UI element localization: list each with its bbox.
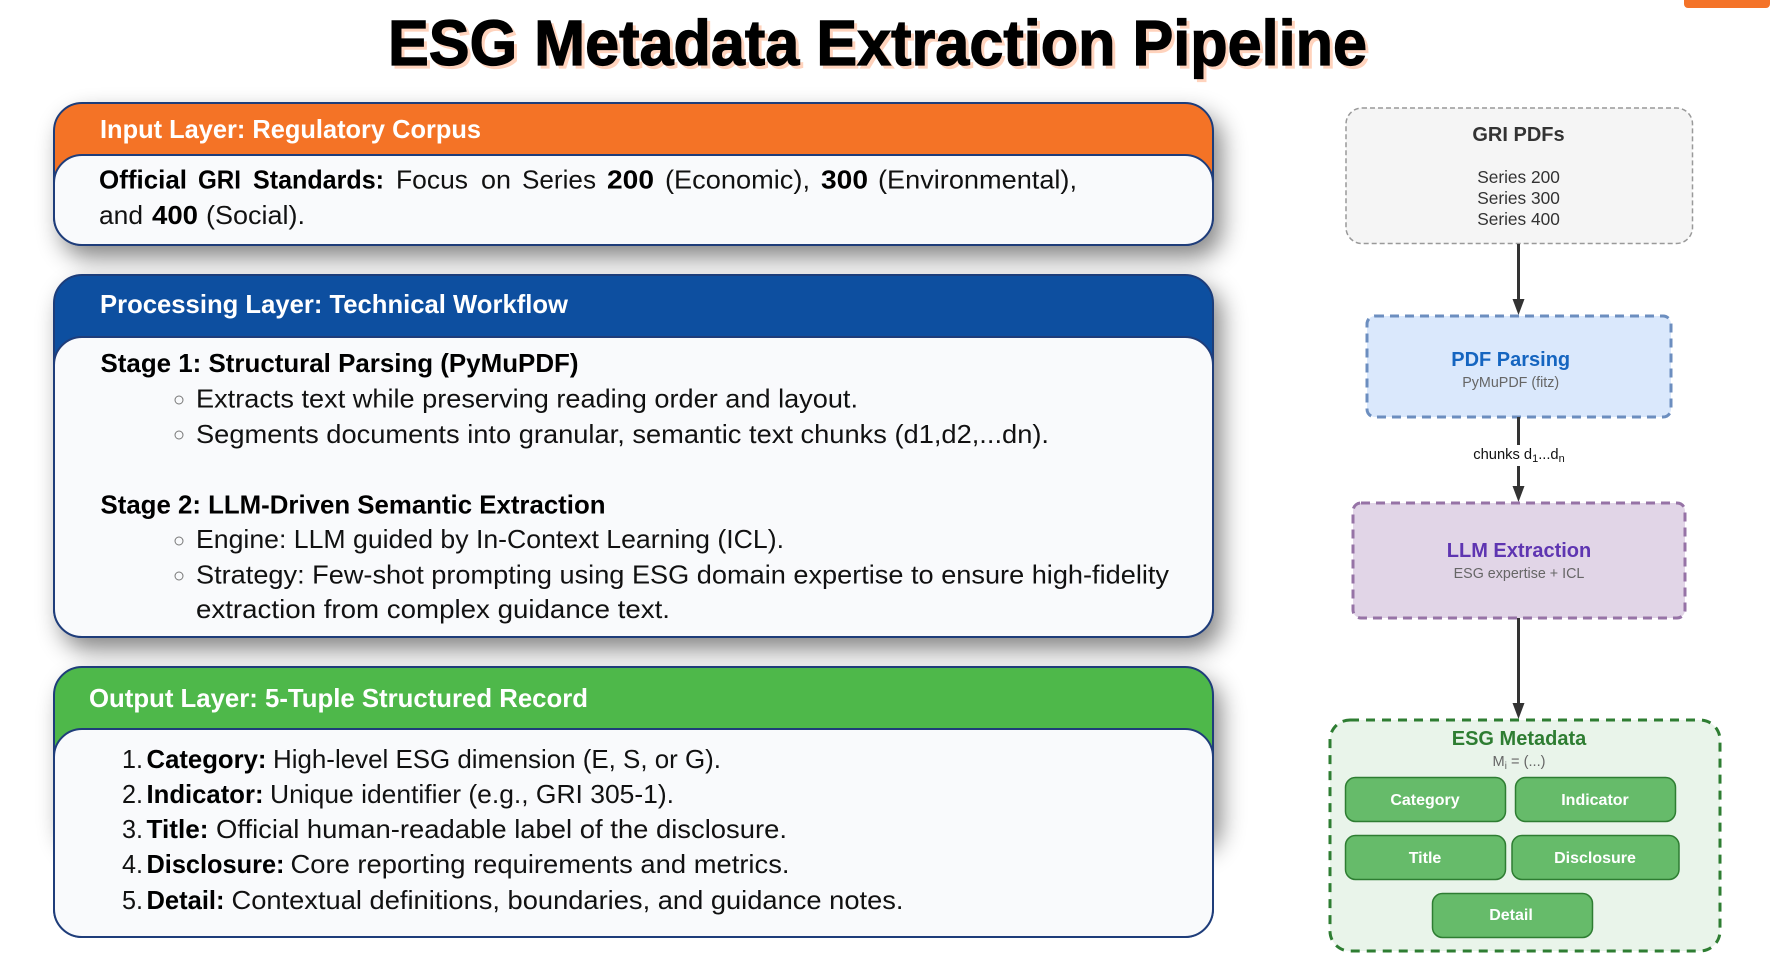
output layer shadow: [54, 667, 1213, 842]
item 2: 2.: [122, 779, 143, 809]
node: GRI PDFs: GRI PDFs: [1472, 124, 1565, 146]
node: LLM Extraction: LLM Extraction: [1447, 540, 1591, 562]
arrow label: chunks: ...d: [1538, 447, 1559, 463]
input layer body: (Social).: [206, 200, 305, 230]
item 5: Contextual definitions, boundaries, and guidance notes.: [232, 885, 904, 915]
node: PDF Parsing: PyMuPDF (fitz): [1462, 375, 1559, 391]
stage 2: Strategy: Few-shot prompting using ESG domain expertise to ensure high-fidelity: [196, 560, 1169, 590]
node: ESG Metadata: i: [1505, 760, 1507, 772]
stage 1: [100, 348, 1049, 449]
node: PDF Parsing: PDF Parsing: [1451, 349, 1570, 371]
input layer header: [54, 103, 1213, 245]
node: GRI PDFs: Series 300: [1477, 188, 1560, 208]
arrow: GRI PDFs to PDF Parsing: [1512, 244, 1524, 315]
output layer header: Output Layer: 5-Tuple Structured Record: [89, 683, 588, 713]
field: Indicator: [1516, 778, 1676, 822]
item 2: Unique identifier (e.g., GRI 305-1).: [270, 779, 674, 809]
item 4: Core reporting requirements and metrics.: [290, 849, 790, 879]
input layer body: Series: [522, 164, 596, 194]
arrow label: chunks: 1: [1532, 453, 1538, 465]
field: Category: Category: [1390, 792, 1460, 809]
stage 2: extraction from complex guidance text.: [196, 594, 670, 624]
panel: input layer: [54, 103, 1213, 245]
node: GRI PDFs: Series 400: [1477, 209, 1560, 229]
item 4: Disclosure:: [146, 849, 284, 879]
title: ESG Metadata Extraction Pipeline: [388, 7, 1367, 79]
input layer body: on: [481, 164, 511, 194]
input layer body: 400: [152, 200, 198, 230]
input layer body: (Economic),: [665, 164, 810, 194]
node: PDF Parsing: [1367, 316, 1671, 417]
field: Disclosure: [1512, 836, 1679, 880]
field: Indicator: Indicator: [1561, 792, 1629, 809]
item 4: 4.: [122, 849, 143, 879]
stage 2: Stage 2: LLM-Driven Semantic Extraction: [100, 490, 606, 520]
item 5: Detail:: [146, 885, 224, 915]
item 3: 3.: [122, 814, 143, 844]
node: ESG Metadata: M: [1492, 754, 1505, 770]
node: ESG Metadata: [1330, 720, 1720, 951]
item 5: 5.: [122, 885, 143, 915]
item 1: Category:: [146, 744, 266, 774]
input layer body: (Environmental),: [878, 164, 1077, 194]
item 1: High-level ESG dimension (E, S, or G).: [273, 744, 721, 774]
node: GRI PDFs: Series 200: [1477, 167, 1560, 187]
input layer body: Standards:: [253, 164, 384, 194]
node: LLM Extraction: [1353, 503, 1685, 618]
input layer body: GRI: [198, 164, 241, 194]
arrow label: chunks: n: [1559, 453, 1565, 465]
item 2: Indicator:: [146, 779, 264, 809]
node: ESG Metadata: = (...): [1507, 754, 1546, 770]
input layer body: 300: [821, 164, 868, 194]
input layer body: 200: [607, 164, 654, 194]
item 3: Official human-readable label of the disclosure.: [216, 814, 787, 844]
field: Detail: Detail: [1489, 907, 1533, 924]
node: LLM Extraction: ESG expertise + ICL: [1454, 566, 1584, 582]
field: Detail: [1432, 894, 1592, 938]
stage 2: Engine: LLM guided by In-Context Learning (ICL).: [196, 524, 784, 554]
field: Category: [1346, 778, 1506, 822]
panel: output layer: [54, 667, 1213, 937]
node: ESG Metadata: ESG Metadata: [1452, 728, 1587, 750]
input layer body: [54, 155, 1213, 245]
arrow: PDF Parsing to LLM Extraction: [1512, 417, 1524, 502]
arrow label: chunks: chunks d: [1473, 447, 1532, 463]
processing layer header: Processing Layer: Technical Workflow: [100, 289, 569, 319]
stage 1: Extracts text while preserving reading order and layout.: [196, 384, 858, 414]
stage 2: [100, 490, 1169, 624]
item 1: 1.: [122, 744, 143, 774]
panel: processing layer: [54, 275, 1213, 637]
arrow: LLM Extraction to ESG Metadata: [1512, 618, 1524, 719]
stage 1: Stage 1: Structural Parsing (PyMuPDF): [100, 348, 578, 378]
processing layer header: [54, 275, 1213, 637]
input layer header: Input Layer: Regulatory Corpus: [100, 114, 481, 144]
stage 1: Segments documents into granular, semantic text chunks (d1,d2,...dn).: [196, 419, 1049, 449]
output layer header: [54, 667, 1213, 937]
input layer body: and: [99, 200, 143, 230]
field: Title: [1346, 836, 1506, 880]
input layer body: Focus: [396, 164, 468, 194]
item 3: Title:: [146, 814, 208, 844]
field: Disclosure: Disclosure: [1554, 850, 1636, 867]
input layer body: Official: [99, 164, 187, 194]
processing layer body: [54, 337, 1213, 637]
output layer body: [54, 729, 1213, 937]
decorative tab: orange top bar: [1684, 0, 1770, 8]
node: GRI PDFs: [1346, 108, 1692, 244]
field: Title: Title: [1409, 850, 1441, 867]
